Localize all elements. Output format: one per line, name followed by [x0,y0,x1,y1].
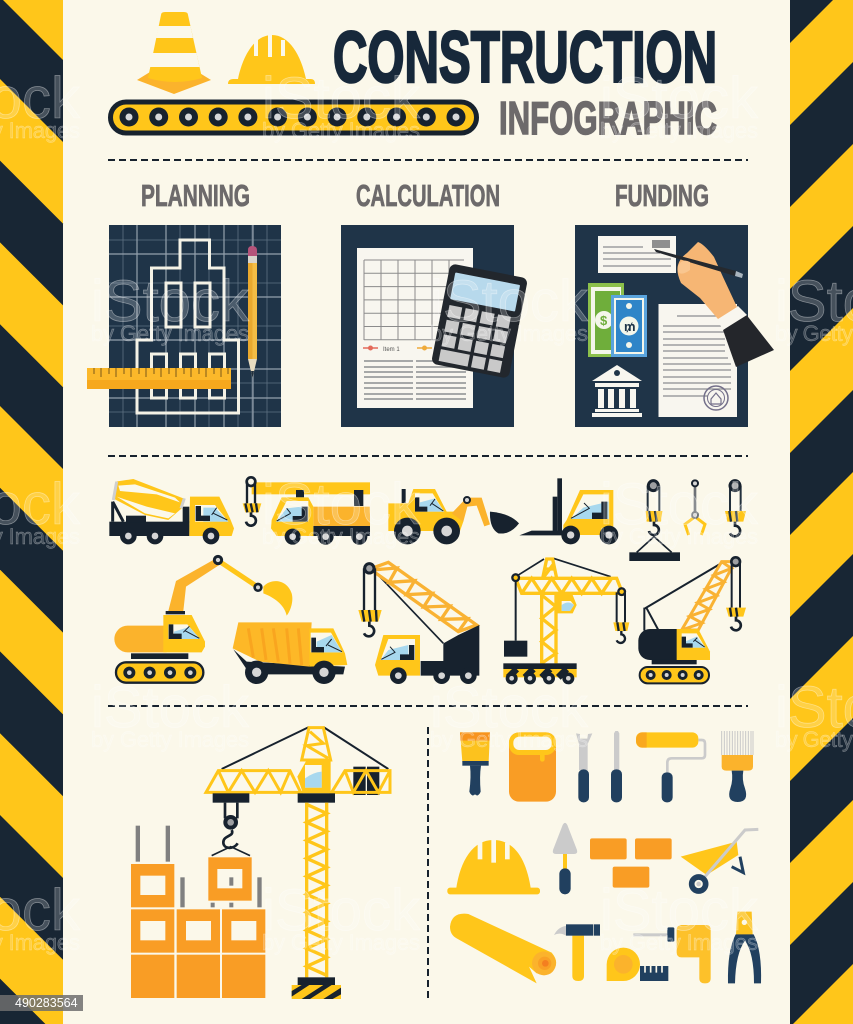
watermark: iStock by Getty Images: iStock [600,878,759,943]
icon: pencil [248,246,257,378]
icon: calculator [431,263,528,379]
watermark: iStock by Getty Images: iStock [91,269,250,334]
icon: hammer [554,924,600,981]
watermark: iStock by Getty Images: by Getty Images [600,524,758,549]
vehicle: backhoe loader [388,489,519,544]
icon: paintbrush [460,732,490,799]
vehicle: tower crane on wheels [503,558,629,684]
paper with table [357,248,473,408]
divider 1 [108,159,748,161]
divider 3 [108,705,748,707]
icon: wrench [576,733,592,802]
hook and suspended block [208,803,252,901]
icon: banknotes: $ [600,313,608,328]
paper with table: Item 1 [383,347,400,353]
vehicle: dump truck [233,622,347,684]
cheque [598,236,676,273]
vehicle: forklift [519,478,618,544]
heading: calculation: CALCULATION [356,178,500,213]
watermark: iStock by Getty Images: iStock [430,269,589,334]
right hazard stripe band [790,0,853,1024]
icon: banknotes: ₥ [624,319,636,334]
icon: claw hook [685,480,705,535]
conveyor belt [110,102,476,133]
panel: planning blueprint [87,225,281,427]
vehicle: lattice truck crane [358,562,479,684]
watermark: iStock by Getty Images: by Getty Images [430,727,588,752]
vehicle: crawler crane [638,557,746,683]
panel: funding [575,225,774,427]
icon: hand signing [654,242,774,367]
watermark: iStock by Getty Images: by Getty Images [91,321,249,346]
icon: ruler [87,368,231,389]
image id tag: 490283564 [15,996,78,1010]
watermark: iStock by Getty Images: iStock [600,472,759,537]
tools [447,731,761,983]
icon: screwdriver [611,731,622,802]
panel: calculation [341,225,528,427]
icon: bricks [590,838,672,888]
watermark: iStock by Getty Images: by Getty Images [600,118,758,143]
watermark: iStock by Getty Images: by Getty Images [600,930,758,955]
watermark: iStock by Getty Images: iStock [262,472,421,537]
vehicle: cement mixer truck [109,479,234,544]
subtitle: infographic: INFOGRAPHIC [499,92,717,144]
icon: paint roller [636,732,705,802]
watermark: iStock by Getty Images: by Getty [775,321,853,346]
icon: tape measure [607,948,668,981]
blueprint building outline [137,240,238,413]
crane jib and stays [206,727,391,803]
icon: wheelbarrow [681,829,758,891]
watermark: iStock by Getty Images: iStock [262,66,421,131]
icon: traffic cone [137,12,211,94]
icon: plain hook [725,481,746,536]
watermark: iStock by Getty Images: iStock [91,675,250,740]
watermark: iStock by Getty Images: by Getty Images [262,524,420,549]
image id tag [0,995,83,1011]
document with seal [658,304,737,417]
vehicles, right zone [358,478,746,684]
icon: wide brush [722,731,753,802]
vertical divider [427,727,429,1000]
watermark: iStock by Getty Images: by Getty Images [91,727,249,752]
icon: hook with load [629,481,680,561]
divider 2 [108,455,748,457]
icon: hard hat large [447,839,540,894]
watermark: iStock by Getty Images: by Getty Images [430,321,588,346]
heading: planning: PLANNING [141,178,250,213]
watermark: iStock by Getty Images: by Getty [775,727,853,752]
vehicles, left zone [109,477,370,684]
vehicle: excavator [114,556,292,683]
heading: funding: FUNDING [615,178,709,213]
crane mast [292,803,341,999]
vehicle: mobile crane truck [243,477,370,545]
icon: bank building [592,365,642,417]
icon: pliers [728,912,761,983]
illustration: tower crane building [131,727,391,999]
icon: banknotes [588,283,647,357]
icon: power drill [633,925,711,983]
watermark: iStock by Getty Images: by Getty Images [262,930,420,955]
icon: hard hat [228,35,315,84]
left hazard stripe band [0,0,63,1024]
icon: trowel [553,823,577,894]
watermark: iStock by Getty Images: iStock [262,878,421,943]
watermark: iStock by Getty Images: iStock [430,675,589,740]
watermark: iStock by Getty Images: iStock [600,66,759,131]
icon: paint can [509,732,556,802]
icon: rolled plan [450,914,556,983]
building blocks [131,826,265,998]
watermark: iStock by Getty Images: by Getty Images [262,118,420,143]
